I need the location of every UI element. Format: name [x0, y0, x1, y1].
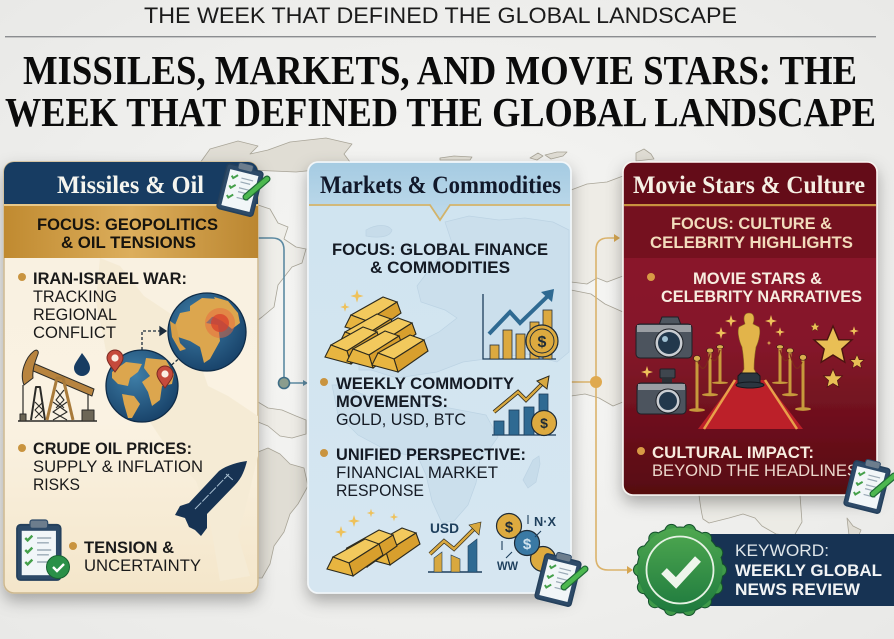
icon: dashed route arrow — [142, 327, 182, 368]
text: unified perspective — [320, 445, 526, 500]
icon: USD growth chart: USD — [430, 521, 459, 536]
panel: missiles and oil — [4, 162, 258, 593]
icon: currency exchange coins: N·X — [534, 514, 556, 529]
text: Iran-Israel war: CONFLICT — [33, 323, 116, 342]
text: Iran-Israel war: TRACKING — [33, 287, 117, 306]
icon: golden statue — [736, 313, 764, 388]
icon: conflict globe — [168, 293, 246, 371]
text: weekly commodity movements: MOVEMENTS: — [336, 392, 448, 411]
text: unified perspective: RESPONSE — [336, 481, 424, 500]
text: crude oil prices: SUPPLY & INFLATION — [33, 457, 203, 476]
icon: currency exchange coins: WW — [497, 559, 519, 573]
focus band — [624, 204, 876, 258]
panel header: Markets & Commodities — [320, 172, 561, 199]
connector: blue from panel 1 to panel 2 — [258, 238, 308, 388]
text: movie stars narratives — [647, 269, 862, 306]
text: tension and uncertainty: TENSION & — [84, 538, 174, 557]
icon: currency exchange coins: $ — [523, 536, 532, 553]
icon: gold stars — [810, 322, 864, 387]
icon: oil pump jack — [18, 350, 97, 421]
icon: small commodity chart: $ — [540, 415, 548, 431]
text: tension and uncertainty — [69, 538, 201, 575]
focus band: FOCUS: CULTURE & — [671, 215, 832, 233]
faint map in panel — [332, 216, 569, 523]
icons: sparkles around statue — [715, 315, 859, 345]
background world map — [200, 138, 861, 578]
icon: growth chart with coin: $ — [538, 334, 547, 351]
icon: gold bar pyramid — [325, 289, 428, 372]
panel header — [4, 162, 258, 204]
keyword text: WEEKLY GLOBAL — [735, 561, 882, 580]
icon: missile — [175, 461, 247, 536]
icon: growth chart with coin — [483, 289, 558, 359]
icon: rope stanchions — [689, 345, 811, 412]
icon: top camera — [636, 317, 692, 358]
panel: markets and commodities — [308, 162, 571, 593]
icon: checklist clipboard — [17, 520, 70, 580]
text: Iran-Israel war: REGIONAL — [33, 305, 117, 324]
panel header — [309, 163, 570, 221]
focus band: CELEBRITY HIGHLIGHTS — [650, 234, 853, 252]
connector: gold from panel 2 to panel 3 and keyword — [571, 234, 633, 574]
icon: small commodity chart — [492, 376, 556, 436]
icon: green check badge — [636, 526, 724, 614]
icon: panel 2 clipboard — [534, 549, 585, 607]
text: cultural impact: CULTURAL IMPACT: — [652, 443, 814, 462]
panel header: Movie Stars & Culture — [633, 172, 865, 199]
text: Iran-Israel war — [18, 269, 187, 342]
icon: oil drop — [74, 353, 90, 376]
icon: gold bars small — [327, 509, 420, 576]
text: crude oil prices: RISKS — [33, 475, 80, 494]
icon: panel 1 clipboard — [216, 159, 267, 217]
text: focus global finance — [332, 241, 548, 277]
focus band: & OIL TENSIONS — [61, 234, 196, 252]
icon: currency exchange coins — [496, 514, 556, 573]
icon: panel 3 clipboard — [843, 456, 894, 514]
text: movie stars narratives: CELEBRITY NARRATIVES — [661, 287, 862, 306]
icon: USD growth chart — [428, 521, 482, 572]
text: focus global finance: & COMMODITIES — [370, 259, 510, 277]
icon: pinned globe — [106, 350, 178, 422]
panel header — [624, 163, 876, 204]
keyword text: NEWS REVIEW — [735, 580, 861, 599]
focus band — [4, 204, 258, 258]
text: Iran-Israel war: IRAN-ISRAEL WAR: — [33, 269, 187, 288]
faint map in panel — [96, 258, 258, 581]
text: unified perspective: FINANCIAL MARKET — [336, 463, 498, 482]
focus band: FOCUS: GEOPOLITICS — [37, 216, 218, 234]
keyword banner — [700, 534, 894, 606]
text: weekly commodity movements: WEEKLY COMMODITY — [336, 374, 515, 393]
icon: map pins — [107, 350, 173, 388]
text: weekly commodity movements: GOLD, USD, BTC — [336, 410, 466, 429]
text: tension and uncertainty: UNCERTAINTY — [84, 556, 201, 575]
text: movie stars narratives: MOVIE STARS & — [693, 269, 822, 288]
icon: lower camera — [637, 366, 686, 414]
text: crude oil prices: CRUDE OIL PRICES: — [33, 439, 192, 458]
text: weekly commodity movements — [320, 374, 515, 429]
text: cultural impact: BEYOND THE HEADLINES — [652, 461, 858, 480]
text: crude oil prices — [18, 439, 203, 494]
panel: movie stars and culture — [623, 162, 877, 495]
text: unified perspective: UNIFIED PERSPECTIVE: — [336, 445, 526, 464]
main headline — [5, 47, 876, 135]
panel header: Missiles & Oil — [57, 172, 204, 199]
text: focus global finance: FOCUS: GLOBAL FINANCE — [332, 241, 548, 259]
icon: red carpet — [698, 380, 803, 429]
keyword text: KEYWORD: — [735, 541, 829, 560]
text: cultural impact — [637, 443, 858, 480]
icon: currency exchange coins: $ — [505, 519, 514, 536]
keyword text — [735, 541, 882, 599]
top subtitle: THE WEEK THAT DEFINED THE GLOBAL LANDSCAPE — [144, 3, 737, 28]
